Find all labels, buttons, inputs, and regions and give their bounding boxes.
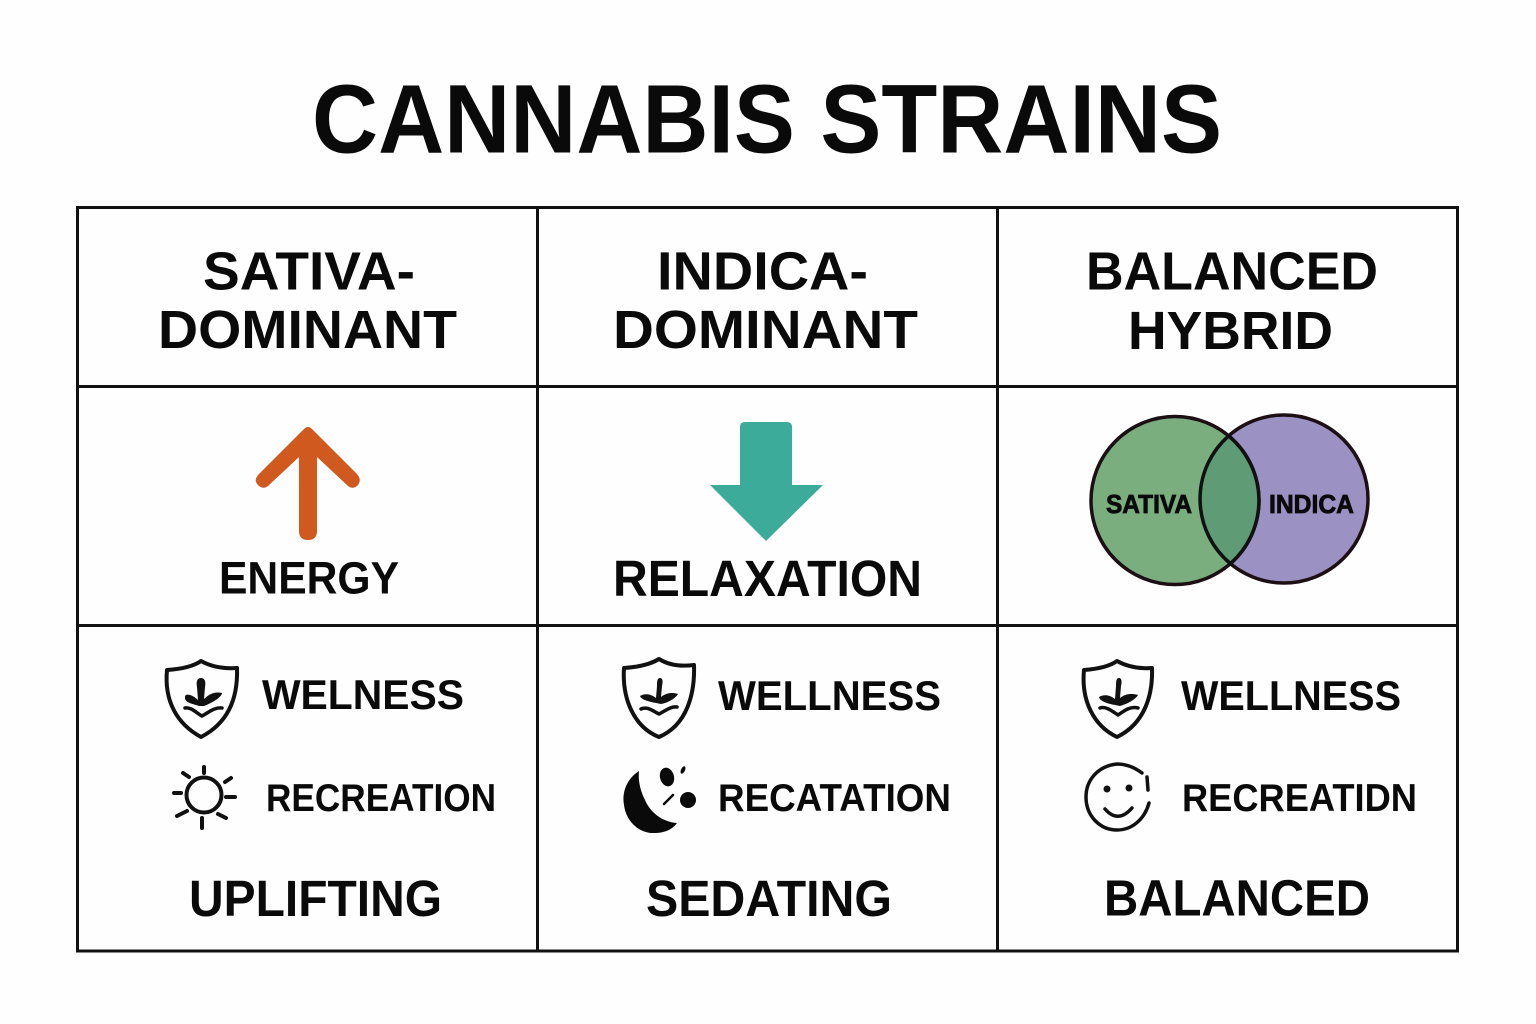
icon: shield wellness (sativa) xyxy=(167,661,237,737)
icon: orange up arrow xyxy=(256,427,360,540)
label: recatation: RECATATION xyxy=(718,777,951,820)
label: welnes: WELNESS xyxy=(262,671,464,718)
label: energy: ENERGY xyxy=(219,552,399,604)
heading: balanced hybrid xyxy=(1086,242,1378,361)
label: balanced: BALANCED xyxy=(1104,870,1370,926)
icon: teal down arrow xyxy=(710,422,823,541)
label: recreatidn: RECREATIDN xyxy=(1182,777,1417,820)
label: recreation: RECREATION xyxy=(266,777,496,820)
heading: balanced hybrid: BALANCED xyxy=(1086,242,1378,302)
heading: sativa-dominant: DOMINANT xyxy=(158,300,457,360)
venn diagram: sativa and indica: SATIVA xyxy=(1106,489,1192,519)
heading: indica-dominant: DOMINANT xyxy=(613,300,918,360)
comparison table grid xyxy=(78,208,1458,951)
icon: sun xyxy=(174,767,235,828)
heading: sativa-dominant: SATIVA- xyxy=(203,242,415,302)
icon: shield wellness (hybrid) xyxy=(1084,661,1152,737)
heading: indica-dominant: INDICA- xyxy=(657,242,868,302)
label: wellness: WELLNESS xyxy=(718,672,941,719)
venn diagram: sativa and indica xyxy=(1091,415,1368,584)
label: wellness: WELLNESS xyxy=(1181,672,1401,719)
icon: shield wellness (indica) xyxy=(624,659,694,737)
venn diagram: sativa and indica: INDICA xyxy=(1269,489,1354,519)
title: CANNABIS STRAINS xyxy=(312,64,1222,174)
label: uplifting: UPLIFTING xyxy=(189,870,442,927)
heading: sativa-dominant xyxy=(158,242,457,360)
label: sedating: SEDATING xyxy=(646,870,892,927)
icon: moon and dots xyxy=(623,766,696,833)
heading: balanced hybrid: HYBRID xyxy=(1128,301,1333,361)
label: relaxation: RELAXATION xyxy=(613,550,922,607)
heading: indica-dominant xyxy=(613,242,918,360)
icon: smiley face xyxy=(1086,764,1149,830)
